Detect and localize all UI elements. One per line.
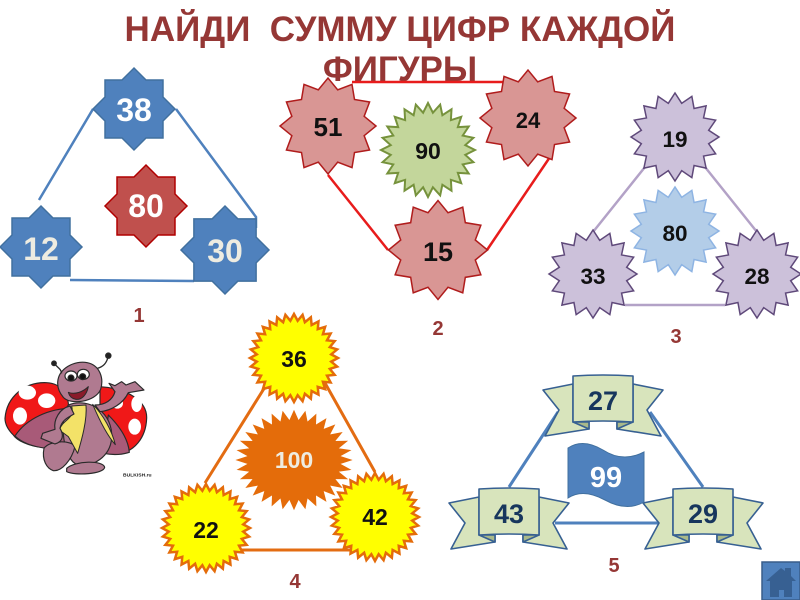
star 90: 90	[415, 138, 441, 164]
star 80 blue: 80	[662, 221, 688, 246]
sun 22: 22	[193, 517, 219, 543]
arm right with hand	[95, 382, 144, 412]
mouth	[68, 387, 88, 399]
sun 100: 100	[275, 447, 313, 473]
star 90	[381, 103, 475, 197]
star 80 blue	[631, 187, 719, 275]
ribbon 29	[643, 488, 763, 549]
label 3: 3	[670, 326, 682, 348]
wings	[5, 383, 147, 455]
star 28	[713, 230, 800, 318]
panel 2: red spiky stars	[280, 70, 576, 300]
star 30	[181, 206, 269, 294]
star 28: 28	[744, 264, 770, 289]
star 12: 12	[23, 231, 59, 267]
sun 42: 42	[362, 504, 388, 530]
panel 5: ribbons and flag	[449, 375, 763, 549]
sun 36	[250, 314, 338, 402]
star 19: 19	[662, 127, 688, 152]
label 5: 5	[608, 555, 620, 577]
antennae	[54, 356, 108, 373]
ribbon 43: 43	[494, 499, 524, 529]
body	[63, 403, 112, 465]
label 2: 2	[432, 318, 444, 340]
star 24	[480, 70, 576, 166]
star 12	[0, 206, 82, 288]
leg	[43, 442, 75, 471]
label 1: 1	[133, 305, 145, 327]
label 4: 4	[289, 571, 301, 593]
ribbon 29: 29	[688, 499, 718, 529]
eyes	[65, 371, 77, 381]
star 38	[93, 68, 175, 150]
star 33: 33	[580, 264, 606, 289]
panel 4: yellow suns	[162, 314, 419, 572]
flag 99: 99	[590, 462, 622, 494]
logo text: BULKISH.ru	[123, 473, 152, 479]
star 80: 80	[128, 188, 164, 224]
arm left	[41, 406, 74, 444]
title: НАЙДИ СУММУ ЦИФР КАЖДОЙ	[125, 10, 675, 49]
panel 3: purple spiky stars	[549, 93, 800, 318]
star 15: 15	[423, 237, 453, 267]
star 51	[280, 78, 376, 174]
foot	[67, 462, 105, 474]
ladybug illustration	[5, 353, 152, 479]
star 38: 38	[116, 92, 152, 128]
star 30: 30	[207, 233, 243, 269]
home button	[762, 562, 800, 600]
ribbon 43	[449, 488, 569, 549]
sun 42	[331, 473, 419, 561]
star 19	[631, 93, 719, 181]
title: ФИГУРЫ	[323, 50, 477, 89]
sun 36: 36	[281, 346, 307, 372]
star 15	[388, 200, 488, 300]
yellow bib	[59, 404, 115, 453]
sun 22	[162, 484, 250, 572]
star 80	[105, 165, 187, 247]
head	[58, 362, 102, 402]
sun 100	[237, 411, 351, 509]
ribbon 27: 27	[588, 386, 618, 416]
flag 99	[568, 443, 644, 507]
ribbon 27	[543, 375, 663, 436]
star 33	[549, 230, 637, 318]
star 51: 51	[314, 112, 342, 142]
star 24: 24	[516, 108, 541, 133]
panel 1: blue eight-point stars	[0, 68, 269, 294]
